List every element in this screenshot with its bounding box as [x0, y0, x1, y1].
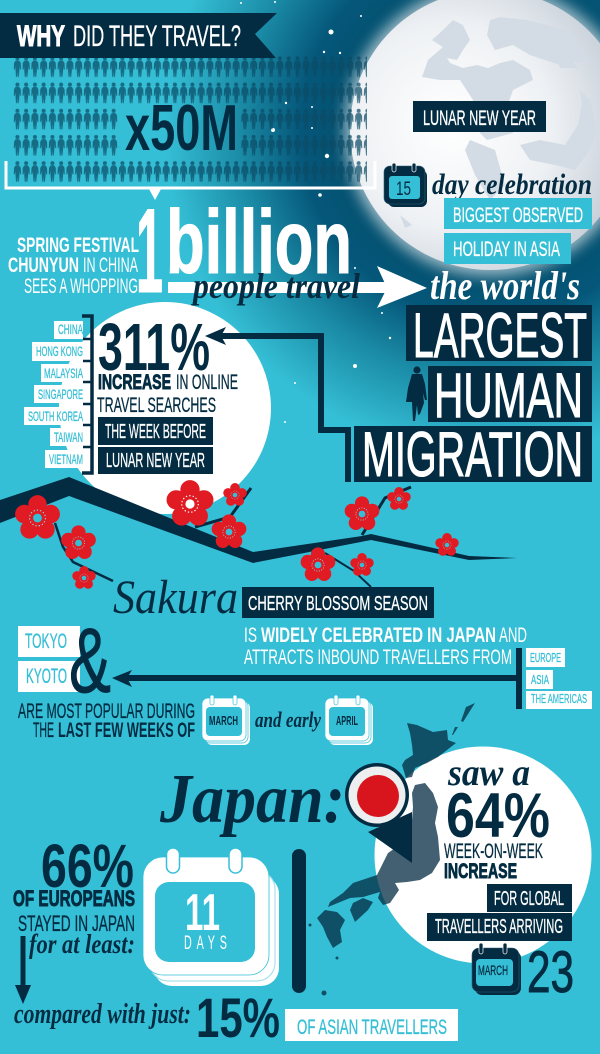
calendar: 11 days: DAYS	[184, 933, 227, 954]
label: kyoto: KYOTO	[26, 665, 67, 688]
calendar: march 23: MARCH	[478, 963, 508, 978]
label: asia	[526, 670, 553, 689]
calendar: 11 days: 11	[185, 884, 220, 942]
label: biggest observed	[444, 198, 592, 229]
calendar: april: APRIL	[336, 713, 358, 728]
text: most popular: LAST FEW WEEKS OF	[58, 719, 195, 742]
text: increase in online: TRAVEL SEARCHES	[97, 394, 216, 417]
label: tokyo: TOKYO	[25, 630, 67, 653]
label: the week before: THE WEEK BEFORE	[105, 421, 206, 443]
text: increase in online: INCREASE	[98, 371, 171, 394]
calendar: 11 days	[143, 848, 279, 986]
calendar: march 23	[472, 943, 521, 995]
text: widely celebrated: IS	[244, 624, 257, 647]
label: lunar new year	[98, 447, 213, 474]
text: spring festival: IN CHINA	[83, 254, 138, 277]
Japan heading: Japan:	[159, 761, 345, 838]
text: spring festival: SEES A WHOPPING	[24, 275, 138, 298]
moon	[344, 0, 600, 276]
country labels: SOUTH KOREA	[28, 409, 83, 424]
Sakura: Sakura	[113, 571, 238, 624]
66%: 66%	[41, 832, 134, 900]
calendar: march: MARCH	[209, 713, 238, 728]
1 billion: billion	[166, 193, 352, 293]
311%: 311%	[98, 310, 210, 385]
banner: why did they travel	[0, 13, 277, 58]
label: of asian travellers	[285, 1009, 458, 1041]
arrow to tokyo	[112, 648, 522, 709]
text: widely celebrated: WIDELY CELEBRATED IN JAPAN	[261, 624, 496, 647]
label: the week before	[98, 417, 213, 445]
text: spring festival	[8, 234, 139, 298]
23: 23	[527, 940, 574, 1005]
country labels: MALAYSIA	[44, 366, 83, 381]
1 billion: 1	[136, 184, 163, 318]
stars	[240, 1, 401, 481]
white circle: japan panel	[374, 746, 592, 964]
1 billion	[136, 184, 352, 318]
country labels: HONG KONG	[36, 344, 83, 359]
banner: why did they travel: DID THEY TRAVEL?	[73, 20, 241, 53]
calendar: 15 day	[384, 163, 427, 207]
down arrow	[15, 936, 31, 1004]
text: widely celebrated	[244, 624, 527, 669]
country comb	[82, 316, 92, 473]
cherry branch	[0, 477, 517, 587]
country labels: TAIWAN	[54, 430, 83, 445]
people rows	[13, 56, 367, 184]
vertical divider	[292, 849, 306, 993]
label: lunar new year: LUNAR NEW YEAR	[106, 450, 205, 472]
text: most popular	[18, 700, 195, 742]
white circle: search panel	[59, 302, 271, 514]
label: asia: ASIA	[531, 672, 549, 687]
text: of europeans: STAYED IN JAPAN	[18, 911, 135, 936]
text: of europeans	[13, 886, 135, 936]
label: travellers arriving	[427, 913, 572, 941]
country labels	[24, 321, 83, 468]
and early: and early	[255, 707, 321, 732]
ampersand: &	[69, 610, 111, 712]
location pin with flag	[345, 763, 412, 863]
map of Japan	[308, 703, 475, 996]
label: tokyo	[18, 626, 80, 657]
label: europe: EUROPE	[530, 650, 561, 665]
country labels: SINGAPORE	[38, 387, 83, 402]
people travel: people travel	[190, 266, 360, 306]
night sky gradient	[0, 0, 600, 520]
label: kyoto	[18, 661, 80, 692]
for at least: for at least:	[29, 929, 135, 959]
label: europe	[526, 648, 565, 667]
white arrow	[168, 266, 427, 308]
country labels: CHINA	[58, 322, 83, 337]
text: week-on-week increase: INCREASE	[444, 860, 517, 883]
text: most popular: ARE MOST POPULAR DURING	[18, 700, 195, 723]
x50M: x50M	[125, 91, 238, 164]
label: cherry blossom season: CHERRY BLOSSOM SEASON	[248, 593, 428, 615]
64%: 64%	[446, 781, 550, 851]
text: week-on-week increase	[444, 840, 543, 883]
compared with just: compared with just:	[14, 998, 191, 1030]
saw a: saw a	[447, 752, 530, 794]
text: of europeans: OF EUROPEANS	[13, 886, 135, 911]
calendar: 15 day: 15	[396, 179, 411, 200]
text: widely celebrated: AND	[499, 624, 527, 647]
bracket	[6, 161, 375, 200]
label: for global	[487, 884, 572, 912]
text: spring festival: SPRING FESTIVAL	[17, 234, 139, 257]
country labels: VIETNAM	[49, 452, 83, 467]
label: the americas	[526, 691, 592, 709]
text: most popular: THE	[33, 719, 54, 742]
arrow to 311%	[205, 327, 348, 482]
text: spring festival: CHUNYUN	[8, 254, 79, 277]
label: of asian travellers: OF ASIAN TRAVELLERS	[297, 1016, 447, 1039]
calendar: march	[202, 695, 250, 745]
label: cherry blossom season	[242, 587, 434, 618]
label: lunar new year	[413, 101, 546, 132]
label: holiday in asia	[444, 233, 571, 264]
banner: why did they travel: WHY	[17, 20, 65, 53]
15%: 15%	[196, 986, 280, 1049]
calendar: april	[325, 695, 373, 745]
icon: walking person	[406, 366, 427, 421]
blossoms	[15, 480, 459, 589]
text: increase in online: IN ONLINE	[176, 371, 238, 394]
text: increase in online	[97, 371, 238, 417]
